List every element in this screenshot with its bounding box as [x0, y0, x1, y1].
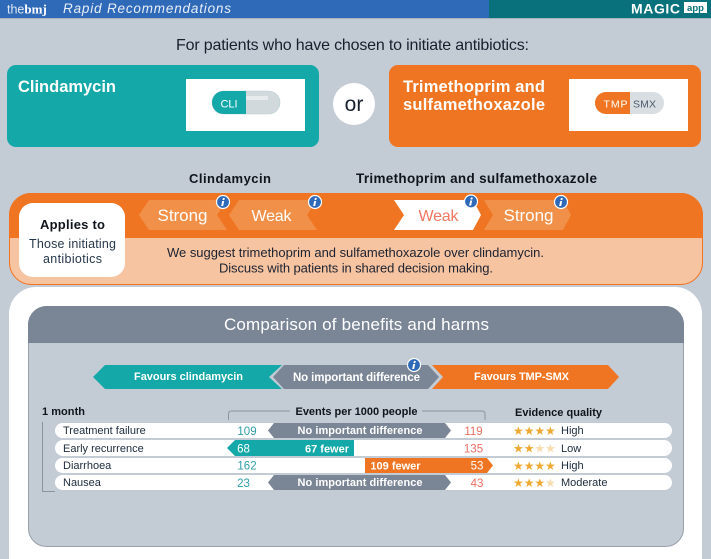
drug image box: TMP: [604, 98, 628, 110]
legend arrow: no important difference: [273, 365, 439, 389]
legend arrow: favours TMP-SMX: Favours TMP-SMX: [474, 371, 570, 383]
evidence column heading: Evidence quality: [515, 407, 603, 419]
row: nausea: No important difference: [298, 477, 422, 489]
row: diarrhoea: High: [561, 460, 584, 472]
row: treatment failure: ★: [524, 424, 534, 438]
strength arrow: strong for TMP-SMX: Strong: [504, 206, 554, 225]
comparison header: Comparison of benefits and harms: [224, 315, 489, 334]
logo: MAGIC app: [631, 0, 707, 16]
row: early recurrence: 67 fewer: [305, 444, 350, 456]
legend arrow: favours clindamycin: [93, 365, 282, 389]
row: diarrhoea: ★: [545, 459, 556, 473]
logo: MAGIC app: MAGIC: [631, 0, 680, 16]
row: early recurrence: ★: [534, 442, 545, 456]
row: early recurrence: Early recurrence: [63, 443, 144, 455]
applies to box: antibiotics: [43, 252, 102, 266]
panel: trimethoprim and sulfamethoxazole option: [389, 65, 701, 147]
row: treatment failure: ★: [513, 424, 524, 438]
time frame label: 1 month: [42, 406, 85, 418]
row: nausea: ★: [545, 476, 556, 490]
row: nausea: 43: [471, 478, 483, 490]
info icons: [216, 195, 568, 208]
row: early recurrence: 135: [464, 444, 483, 456]
recommendation text: Discuss with patients in shared decision making.: [219, 260, 493, 276]
drug image box: [186, 79, 305, 131]
logo: MAGIC app: app: [687, 3, 704, 14]
row: diarrhoea: 53: [471, 460, 483, 472]
strength arrow: weak for clindamycin: [229, 200, 317, 230]
comparison header: [28, 306, 684, 343]
legend arrow: favours TMP-SMX: [432, 365, 619, 389]
row: early recurrence: ★: [513, 442, 524, 456]
row: treatment failure: High: [561, 425, 584, 437]
strength arrow: weak for clindamycin: Weak: [252, 208, 292, 225]
or badge: [333, 83, 375, 125]
row: treatment failure: [55, 423, 672, 438]
icon: info: [408, 358, 420, 372]
strength arrow: weak for TMP-SMX, selected: Weak: [418, 208, 460, 225]
row: treatment failure: 109: [237, 426, 257, 438]
applies to box: [19, 203, 125, 277]
row: diarrhoea: Diarrhoea: [63, 460, 112, 472]
legend arrow: favours clindamycin: Favours clindamycin: [134, 371, 243, 383]
drug image box: [569, 79, 688, 131]
row: nausea: ★: [524, 476, 534, 490]
row: diarrhoea: ★: [513, 459, 524, 473]
row: diarrhoea: 162: [237, 460, 257, 472]
row: treatment failure: 119: [464, 426, 483, 438]
row: nausea: 23: [237, 478, 250, 490]
panel: recommendation: [9, 193, 703, 284]
row: diarrhoea: ★: [534, 459, 545, 473]
panel: comparison outer white card: [9, 287, 702, 559]
row: diarrhoea: [55, 458, 672, 473]
row: early recurrence: 68: [237, 444, 250, 456]
row: diarrhoea: 109 fewer: [370, 460, 421, 472]
strength arrow: strong for TMP-SMX: [484, 200, 571, 230]
row: nausea: [55, 475, 672, 490]
column heading: trimethoprim and sulfamethoxazole: Trimethoprim and sulfamethoxazole: [356, 171, 597, 186]
row: early recurrence: [55, 440, 672, 456]
row: early recurrence: ★: [524, 442, 534, 456]
recommendation text: [167, 245, 544, 276]
intro sentence: For patients who have chosen to initiate antibiotics:: [176, 37, 529, 54]
row: treatment failure: ★: [534, 424, 545, 438]
row: nausea: Moderate: [561, 477, 607, 489]
strength arrow: weak for TMP-SMX, selected: [394, 200, 481, 230]
drug image box: CLI: [220, 98, 238, 110]
or badge: or: [345, 93, 363, 116]
option name: Trimethoprim and: [403, 78, 545, 96]
row: diarrhoea: ★: [524, 459, 534, 473]
row: nausea: ★: [534, 476, 545, 490]
row: nausea: ★: [513, 476, 524, 490]
logo: thebmj: thebmj: [7, 2, 47, 16]
events column heading: Events per 1000 people: [296, 406, 418, 418]
header title: Rapid Recommendations: [63, 1, 231, 16]
row: early recurrence: ★: [545, 442, 556, 456]
panel: clindamycin option: [7, 65, 319, 147]
strength arrow: strong for clindamycin: Strong: [158, 206, 208, 225]
row: treatment failure: ★: [545, 424, 556, 438]
header bar: [0, 0, 711, 18]
drug image box: SMX: [633, 98, 656, 110]
row: treatment failure: No important difference: [298, 425, 422, 437]
row: nausea: Nausea: [63, 477, 102, 489]
events column heading: [228, 406, 485, 420]
panel: comparison: [28, 306, 684, 546]
applies to box: Applies to: [40, 217, 105, 232]
recommendation text: We suggest trimethoprim and sulfamethoxazole over clindamycin.: [167, 245, 544, 260]
legend arrow: no important difference: No important difference: [293, 372, 420, 384]
row: treatment failure: Treatment failure: [63, 425, 146, 437]
column heading: clindamycin: Clindamycin: [189, 171, 271, 186]
strength arrow: strong for clindamycin: [139, 200, 227, 230]
applies to box: Those initiating: [29, 237, 116, 251]
option name: sulfamethoxazole: [403, 96, 545, 114]
row: early recurrence: Low: [561, 443, 581, 455]
option name: Clindamycin: [18, 78, 116, 96]
